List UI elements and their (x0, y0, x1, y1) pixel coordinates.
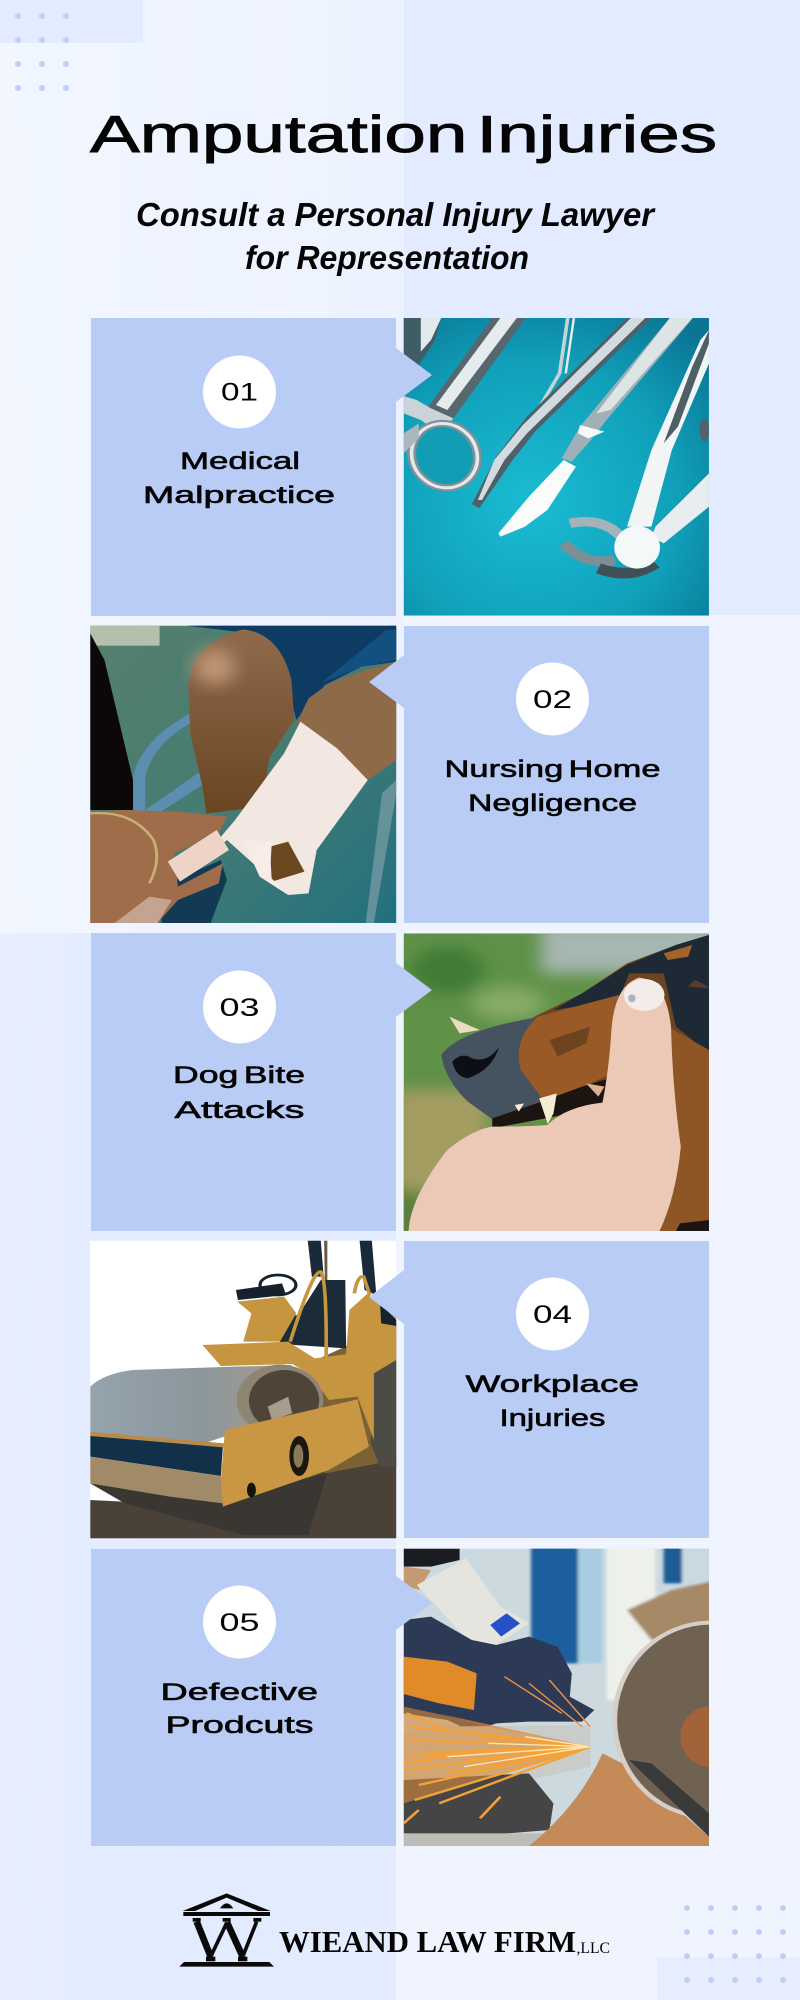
label: Injuries (500, 1405, 606, 1432)
photo: bandaged leg (90, 626, 396, 923)
panel: 02 Nursing Home Negligence (369, 626, 709, 923)
label: Nursing Home (444, 756, 660, 783)
label (143, 448, 335, 509)
arrow pointer (396, 348, 432, 402)
number badge: 05 (220, 1609, 260, 1637)
label: Workplace (466, 1371, 639, 1398)
arrow pointer (396, 1576, 432, 1630)
panel: 05 Defective Prodcuts (91, 1549, 432, 1846)
label (444, 756, 660, 817)
arrow pointer (369, 655, 404, 708)
label (466, 1371, 639, 1432)
label: Prodcuts (166, 1712, 314, 1739)
label (173, 1062, 305, 1124)
label (160, 1679, 318, 1739)
logo: Wieand Law Firm (179, 1893, 610, 1967)
label: Dog Bite (173, 1062, 305, 1089)
arrow pointer (396, 963, 432, 1017)
label: Attacks (174, 1097, 304, 1124)
number badge: 02 (533, 686, 572, 714)
panel: 01 Medical Malpractice (91, 318, 432, 616)
number badge (203, 970, 276, 1044)
subtitle: for Representation (245, 239, 529, 276)
logo: Wieand Law Firm: ,LLC (576, 1940, 610, 1957)
title: Amputation Injuries (90, 106, 717, 164)
number badge (203, 1586, 276, 1658)
arrow pointer (369, 1270, 404, 1324)
subtitle (136, 196, 656, 276)
number badge: 04 (533, 1301, 572, 1329)
dot pattern: top left (15, 13, 69, 91)
label: Medical (180, 448, 300, 475)
photo: surgical instruments (404, 318, 709, 616)
photo: angle grinder sparks (404, 1548, 709, 1846)
firm name: WIEAND LAW FIRM (279, 1924, 576, 1959)
dot pattern: bottom right (684, 1905, 786, 1983)
number badge (516, 1278, 589, 1350)
subtitle: Consult a Personal Injury Lawyer (136, 196, 656, 233)
photo: road roller (90, 1241, 396, 1538)
number badge (203, 356, 276, 428)
label: Negligence (468, 790, 637, 817)
number badge (516, 662, 589, 736)
dog underlay avoids seams (533, 935, 709, 1231)
photo: dog biting hand (394, 923, 717, 1237)
panel: 04 Workplace Injuries (369, 1241, 709, 1538)
panel: 03 Dog Bite Attacks (91, 933, 432, 1231)
number badge: 01 (221, 378, 258, 406)
number badge: 03 (220, 994, 260, 1022)
backing machinery (320, 1324, 396, 1474)
label: Malpractice (143, 482, 335, 509)
label: Defective (160, 1679, 318, 1706)
icon: courthouse W (179, 1893, 274, 1967)
